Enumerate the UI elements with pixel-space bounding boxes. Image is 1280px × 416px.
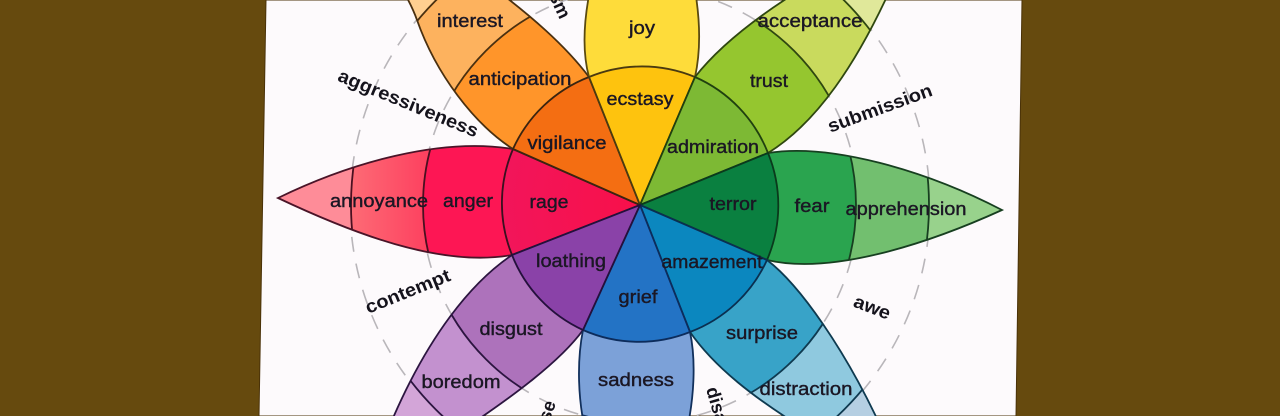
label: interest: interest bbox=[437, 10, 503, 31]
wedge: vigilance bbox=[513, 77, 640, 205]
label: disgust: disgust bbox=[480, 318, 542, 339]
label: trust: trust bbox=[750, 70, 788, 91]
label: joy: joy bbox=[628, 17, 656, 38]
inner circle wedges bbox=[502, 66, 778, 342]
label: annoyance: annoyance bbox=[330, 190, 428, 211]
petal: disgust bbox=[393, 254, 582, 416]
label: grief: grief bbox=[618, 286, 658, 307]
label: apprehension: apprehension bbox=[846, 198, 966, 219]
label: loathing: loathing bbox=[536, 250, 606, 271]
label: anticipation: anticipation bbox=[468, 68, 572, 89]
petal: sadness bbox=[578, 330, 695, 416]
label: amazement: amazement bbox=[662, 251, 762, 272]
petal: trust bbox=[695, 0, 886, 154]
label: terror: terror bbox=[710, 193, 756, 214]
label: surprise: surprise bbox=[726, 322, 798, 343]
label: rage: rage bbox=[530, 191, 568, 212]
wedge: loathing bbox=[512, 205, 640, 330]
label: admiration: admiration bbox=[667, 136, 759, 157]
label: boredom: boredom bbox=[422, 371, 500, 392]
petal: joy bbox=[584, 0, 700, 76]
emotion wheel bbox=[270, 0, 1010, 416]
wedge: rage bbox=[502, 149, 640, 255]
petal: anger bbox=[276, 145, 512, 259]
wedge: ecstasy bbox=[589, 66, 695, 205]
label: anger: anger bbox=[443, 190, 493, 211]
label: ecstasy: ecstasy bbox=[606, 88, 674, 109]
emotion labels bbox=[330, 10, 966, 399]
label: distraction: distraction bbox=[760, 378, 852, 399]
dyad: submission: submission bbox=[825, 79, 935, 137]
petal: surprise bbox=[690, 260, 877, 416]
label: acceptance: acceptance bbox=[758, 10, 862, 31]
wedge: grief bbox=[583, 205, 690, 342]
label: sadness: sadness bbox=[598, 369, 674, 390]
dyad: awe: awe bbox=[851, 290, 894, 324]
dyad labels bbox=[335, 0, 935, 416]
label: vigilance: vigilance bbox=[528, 132, 606, 153]
wedge: terror bbox=[640, 153, 778, 260]
panel: white sheet bbox=[259, 0, 1022, 416]
petal: anticipation bbox=[407, 0, 588, 150]
wedge: admiration bbox=[640, 77, 768, 205]
wedge: amazement bbox=[640, 205, 767, 332]
label: fear: fear bbox=[794, 195, 830, 216]
petal: fear bbox=[768, 150, 1004, 265]
dyad: aggressiveness: aggressiveness bbox=[335, 65, 482, 141]
dyad: contempt: contempt bbox=[362, 264, 453, 318]
dashed guide circles bbox=[350, 0, 930, 416]
